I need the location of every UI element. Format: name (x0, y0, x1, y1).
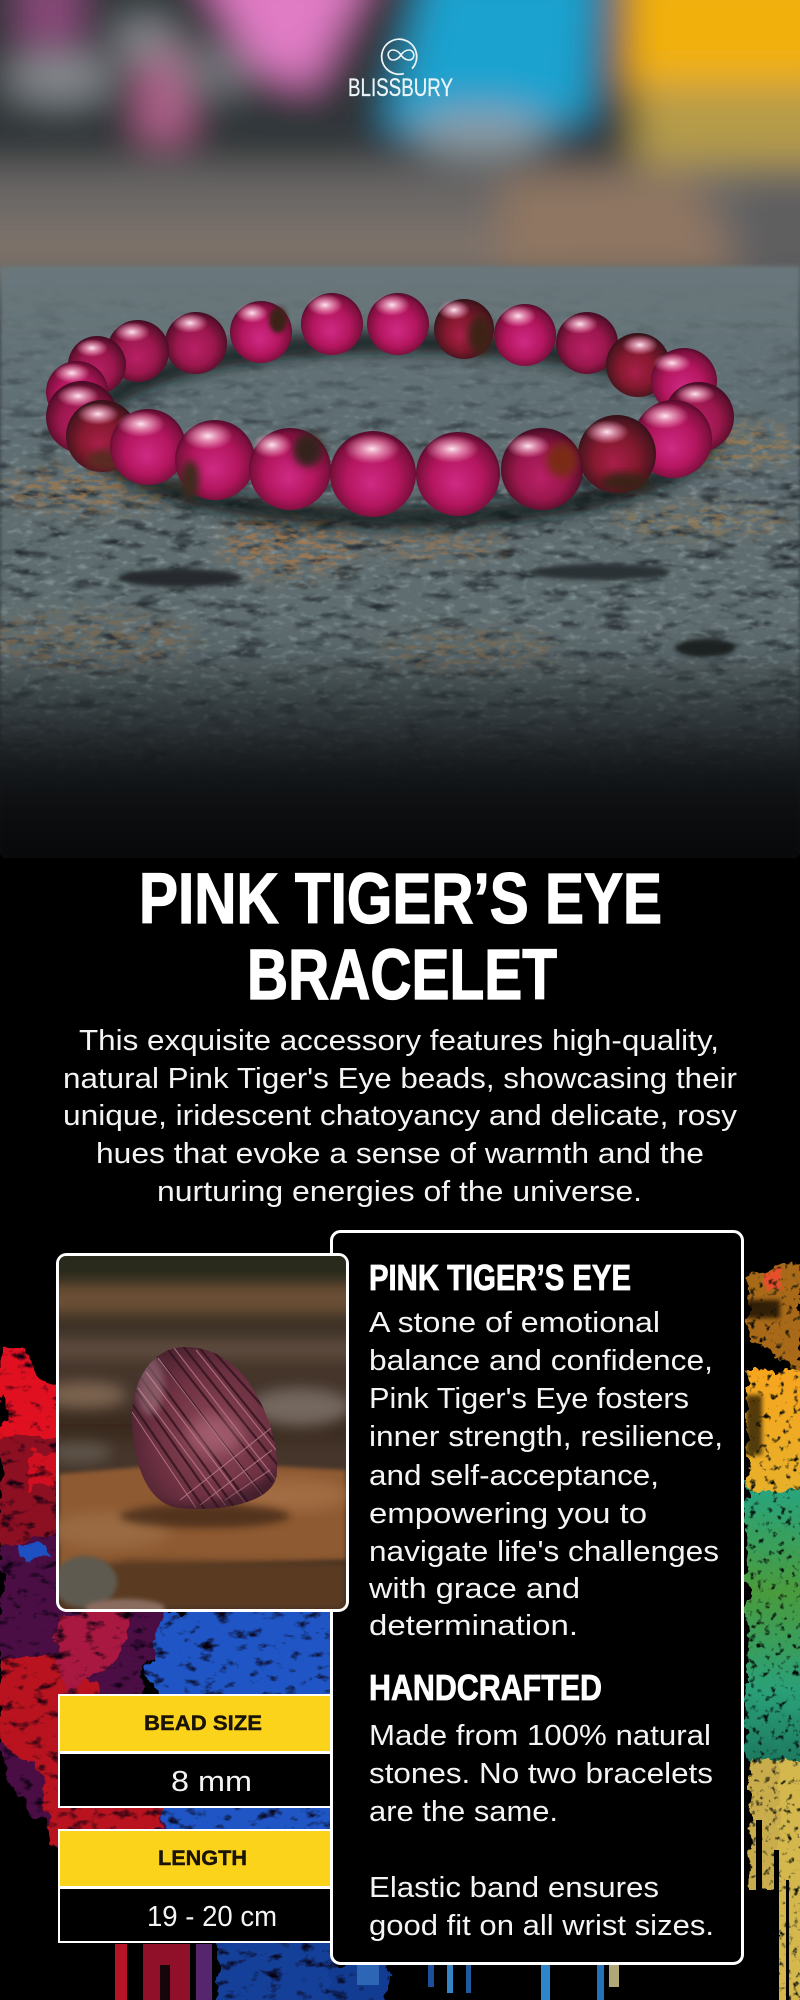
stone surface (0, 266, 800, 858)
text: stone meaning: A stone of emotional (369, 1307, 660, 1339)
blurred graffiti background (0, 0, 800, 290)
panel: stone description (332, 1232, 742, 1964)
paint splash: left red and blue (0, 1350, 619, 2000)
intro paragraph: natural Pink Tiger's Eye beads, showcasing their (63, 1063, 737, 1095)
text: stone meaning: and self-acceptance, (369, 1460, 659, 1492)
paint splash: right orange, green and yellow (746, 1262, 800, 2000)
spec: bead size: 8 mm (171, 1766, 252, 1798)
heading: stone name: PINK TIGER’S EYE (369, 1257, 631, 1298)
bracelet shadow (90, 342, 710, 518)
logo: Blissbury: BLISSBURY (348, 74, 453, 102)
hero photo: bracelet on stone (0, 0, 800, 858)
title: PINK TIGER’S EYE (139, 860, 662, 939)
intro paragraph: hues that evoke a sense of warmth and the (96, 1138, 704, 1170)
spec: bead size: BEAD SIZE (144, 1712, 262, 1735)
spec: length: LENGTH (158, 1847, 247, 1870)
text: handcrafted details: stones. No two bracelets (369, 1758, 713, 1790)
title: BRACELET (247, 936, 557, 1015)
text: stone meaning: with grace and (368, 1573, 580, 1605)
text: stone meaning: determination. (369, 1610, 578, 1642)
text: stone meaning: inner strength, resilience, (369, 1421, 723, 1453)
intro paragraph: nurturing energies of the universe. (157, 1176, 642, 1208)
heading: handcrafted: HANDCRAFTED (369, 1667, 602, 1708)
intro paragraph: This exquisite accessory features high-quality, (79, 1025, 719, 1057)
intro paragraph: unique, iridescent chatoyancy and delicate, rosy (63, 1100, 738, 1132)
text: stone meaning: empowering you to (369, 1498, 647, 1530)
text: handcrafted details: Elastic band ensures (369, 1872, 659, 1904)
text: stone meaning (368, 1307, 723, 1642)
intro paragraph (63, 1025, 738, 1208)
bracelet beads (46, 293, 734, 517)
text: stone meaning: navigate life's challenges (369, 1536, 719, 1568)
text: handcrafted details (369, 1720, 714, 1942)
text: handcrafted details: good fit on all wrist sizes. (369, 1910, 714, 1942)
text: stone meaning: balance and confidence, (369, 1345, 713, 1377)
text: stone meaning: Pink Tiger's Eye fosters (369, 1383, 689, 1415)
logo: Blissbury (348, 34, 453, 102)
spec: length (59, 1830, 339, 1942)
text: handcrafted details: are the same. (369, 1796, 558, 1828)
photo: tumbled pink tiger's eye stone (56, 1253, 349, 1612)
text: handcrafted details: Made from 100% natural (369, 1720, 711, 1752)
stone (132, 1347, 278, 1509)
spec: length: 19 - 20 cm (147, 1901, 277, 1933)
spec: bead size (59, 1695, 339, 1807)
title (139, 860, 662, 1015)
